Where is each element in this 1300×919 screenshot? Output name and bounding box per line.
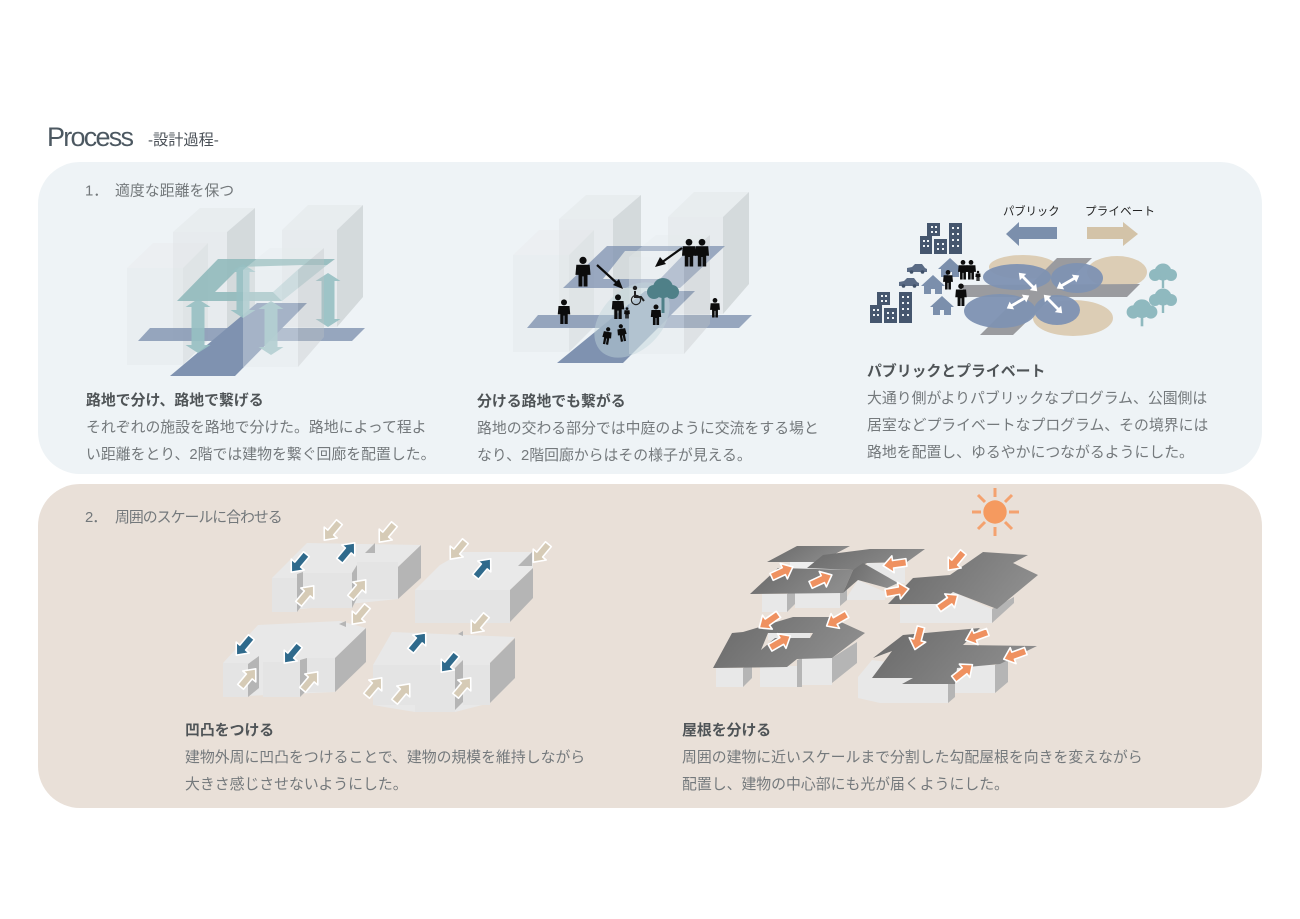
text: public and private: 路地を配置し、ゆるやかにつながるようにした。: [867, 444, 1194, 460]
diagram: stepped massing: [223, 519, 552, 712]
ground floor alleys: [527, 291, 752, 363]
diagram: alley intersection with people: [527, 192, 752, 363]
text: alleys divide and connect: い距離をとり、2階では建物を繋ぐ回廊を配置した。: [86, 446, 435, 462]
icon: sun: [972, 488, 1019, 536]
building cluster bottom left: [223, 621, 366, 697]
courtyard highlight: [580, 268, 684, 372]
text: stepped massing: 建物外周に凹凸をつけることで、建物の規模を維持しながら: [185, 750, 585, 766]
text: alleys divide and connect: それぞれの施設を路地で分けた。路地によって程よ: [86, 420, 427, 436]
text: public and private: [867, 363, 1208, 460]
wheelchair user: [631, 286, 644, 305]
cars: [899, 264, 927, 288]
arrow: private: [1087, 222, 1138, 246]
family: [943, 260, 981, 306]
label: public: パブリック: [1003, 204, 1060, 218]
front building: [243, 248, 324, 367]
city buildings: [870, 223, 962, 323]
back buildings: [127, 205, 363, 365]
building cluster top right: [415, 552, 533, 623]
text: divided roofs: 周囲の建物に近いスケールまで分割した勾配屋根を向きを変えながら: [682, 750, 1143, 766]
text: connected even when divided: 路地の交わる部分では中庭のように交流をする場と: [477, 420, 819, 436]
tree: [647, 278, 679, 313]
text: divided roofs: [682, 722, 1143, 792]
label: private: プライベート: [1085, 205, 1155, 218]
house cluster top left: [750, 546, 925, 612]
panel: match the surrounding scale: [38, 484, 1262, 808]
text: public and private: パブリックとプライベート: [867, 364, 1045, 380]
text: stepped massing: 大きさ感じさせないようにした。: [185, 776, 408, 792]
house cluster bottom right: [858, 628, 1037, 703]
arrow: public: [1006, 222, 1057, 246]
text: public and private: 大通り側がよりパブリックなプログラム、公園側は: [867, 390, 1207, 406]
back buildings: [513, 192, 749, 352]
section heading 2: 2．: [85, 510, 106, 526]
outward arrows: [230, 537, 497, 678]
vertical arrows: [186, 264, 340, 355]
text: divided roofs: 配置し、建物の中心部にも光が届くようにした。: [682, 776, 1009, 792]
diagram: public and private: [870, 204, 1177, 336]
building cluster top left: [272, 543, 421, 612]
diagram: alleys divide and connect: [138, 205, 365, 376]
heading: Process: Process: [47, 122, 132, 152]
house cluster bottom left: [713, 617, 865, 687]
ground floor alleys: [138, 303, 365, 376]
houses: [921, 258, 962, 315]
trees: [1127, 264, 1177, 326]
public zones: [964, 263, 1103, 328]
text: public and private: 居室などプライベートなプログラム、その境界には: [867, 418, 1208, 434]
text: alleys divide and connect: 路地で分け、路地で繋げる: [86, 392, 264, 408]
inward arrows: [234, 517, 555, 707]
text: connected even when divided: [477, 393, 819, 464]
text: stepped massing: 凹凸をつける: [185, 722, 274, 738]
title: [47, 122, 219, 152]
private zones: [989, 255, 1147, 336]
building cluster bottom right: [373, 631, 515, 712]
movement arrows: [597, 248, 682, 289]
section heading 1: 適度な距離を保つ: [115, 183, 234, 199]
section heading 2: 周囲のスケールに合わせる: [115, 510, 282, 526]
orange arrows: [754, 547, 1029, 686]
second floor corridor: [563, 246, 725, 288]
diagram: divided roofs: [713, 488, 1038, 703]
text: alleys divide and connect: [86, 392, 435, 462]
subheading: -設計過程-: [148, 132, 219, 149]
panel: keep a moderate distance: [38, 162, 1262, 474]
section heading 1: 1．: [85, 183, 108, 199]
front building: [629, 235, 710, 354]
second floor corridor: [177, 259, 335, 301]
people: [558, 239, 720, 345]
text: divided roofs: 屋根を分ける: [682, 722, 771, 738]
house cluster top right: [888, 552, 1038, 623]
white arrows: [1004, 270, 1082, 316]
roads: [963, 258, 1140, 335]
text: connected even when divided: なり、2階回廊からはその様子が見える。: [477, 448, 752, 464]
text: connected even when divided: 分ける路地でも繋がる: [477, 394, 626, 410]
text: stepped massing: [185, 722, 585, 792]
